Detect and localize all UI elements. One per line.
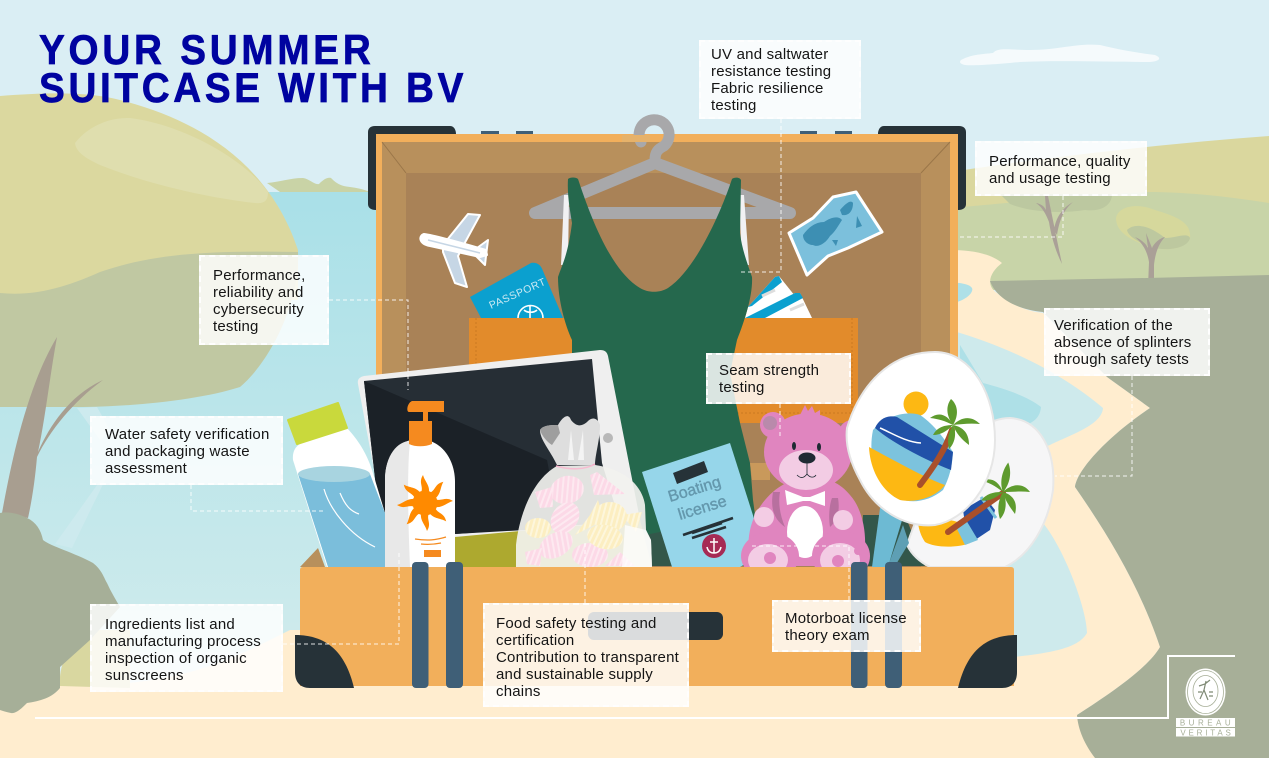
callout: seam strength: testing <box>719 379 765 396</box>
water bottle <box>288 403 385 567</box>
swimsuit <box>558 178 762 566</box>
callout: performance reliability cybersecurity <box>199 255 329 345</box>
suitcase base <box>295 548 1017 688</box>
callout: food safety: Contribution to transparent <box>496 649 679 666</box>
left corner guard <box>295 635 354 688</box>
inner tray <box>750 463 770 480</box>
hill highlight <box>75 118 268 203</box>
lower left hill <box>0 252 298 407</box>
suitcase lid <box>368 126 966 574</box>
callout: water safety: Water safety verification <box>105 426 270 443</box>
world map <box>789 192 882 275</box>
pocket stitching <box>476 318 852 413</box>
callout: performance reliability cybersecurity: Performance, <box>213 267 305 284</box>
callout: motorboat license: Motorboat license <box>785 610 907 627</box>
hanger <box>535 120 790 213</box>
hook shadow on lid <box>622 135 650 142</box>
callout: water safety: assessment <box>105 460 187 477</box>
tablet button <box>603 433 613 443</box>
callout: performance reliability cybersecurity: reliability and <box>213 284 304 301</box>
callout: water safety <box>90 416 283 485</box>
right yellow hill <box>950 136 1269 215</box>
license subtitle: license <box>676 493 729 524</box>
sea <box>0 192 480 652</box>
boarding tickets <box>745 276 812 318</box>
callout: splinter verification <box>1044 308 1210 376</box>
small pool <box>950 283 972 304</box>
boating license <box>642 443 765 567</box>
towel fold <box>888 525 909 566</box>
callout: ingredients: sunscreens <box>105 667 184 684</box>
beach sand <box>0 250 1160 758</box>
organiser pocket <box>469 318 858 423</box>
license title: Boating <box>666 474 723 506</box>
swimsuit shadow <box>620 515 925 566</box>
callout: performance quality usage <box>975 141 1147 196</box>
large beach paddle <box>847 352 995 525</box>
callout: performance reliability cybersecurity: cybersecurity <box>213 301 304 318</box>
passport <box>470 263 563 318</box>
callout: UV and saltwater: resistance testing <box>711 63 831 80</box>
callout: ingredients <box>90 604 283 692</box>
callout: food safety <box>483 603 689 707</box>
lid tabs <box>481 131 852 135</box>
callout: splinter verification: through safety tests <box>1054 351 1189 368</box>
pump <box>407 401 444 446</box>
callout: UV and saltwater: testing <box>711 97 757 114</box>
sun symbol <box>397 475 453 531</box>
tree two <box>1116 206 1190 287</box>
callout: ingredients: inspection of organic <box>105 650 247 667</box>
Bureau Veritas logo <box>1176 668 1235 737</box>
suitcase handle <box>588 612 723 640</box>
bag lower white gloss <box>622 525 652 567</box>
small beach paddle <box>907 418 1053 567</box>
sunscreen bottle <box>385 401 455 567</box>
hanger straps white backing <box>561 195 749 265</box>
paddle picture <box>869 392 980 501</box>
logo seal <box>1186 668 1226 716</box>
tablet screen <box>364 359 620 540</box>
callout: water safety: and packaging waste <box>105 443 250 460</box>
right water <box>950 330 1103 480</box>
cloud <box>960 45 1159 65</box>
candy bag <box>516 416 652 567</box>
teddy bear <box>741 405 870 581</box>
left yellow knoll <box>60 630 130 688</box>
logo word 2: VERITAS <box>1180 728 1234 737</box>
suitcase straps <box>412 562 902 688</box>
right lower water <box>950 505 1087 657</box>
tablet <box>358 350 652 567</box>
passport label: PASSPORT <box>487 276 548 312</box>
callout: ingredients: Ingredients list and <box>105 616 235 633</box>
dashed connector lines <box>191 119 1132 644</box>
anchor glyph <box>707 538 721 553</box>
callout: performance reliability cybersecurity: testing <box>213 318 259 335</box>
light pier stripes <box>55 407 110 548</box>
title: YOUR SUMMER <box>39 25 375 73</box>
callout: seam strength: Seam strength <box>719 362 819 379</box>
bag gloss <box>516 465 652 567</box>
footer rule <box>35 656 1235 718</box>
right dark hill <box>990 275 1269 758</box>
callout: food safety: certification <box>496 632 574 649</box>
tree one <box>1000 194 1112 264</box>
rolled towel <box>872 508 903 567</box>
palm trunk left <box>2 337 103 518</box>
left lid corner <box>368 126 456 210</box>
logo word 1: BUREAU <box>1180 719 1234 728</box>
candies <box>525 472 635 567</box>
callout: motorboat license <box>772 600 921 652</box>
callout: UV and saltwater: UV and saltwater <box>711 46 828 63</box>
far island <box>267 178 370 192</box>
right lid corner <box>878 126 966 210</box>
tablet cover <box>455 520 652 567</box>
callout: splinter verification: Verification of the <box>1054 317 1173 334</box>
anchor badge <box>702 534 726 558</box>
plane icon <box>420 214 488 287</box>
callout: performance quality usage: Performance, quality <box>989 153 1131 170</box>
bag ruffle <box>540 416 600 465</box>
right green hill <box>950 192 1269 290</box>
callout: motorboat license: theory exam <box>785 627 870 644</box>
right corner guard <box>958 635 1017 688</box>
callout: performance quality usage: and usage testing <box>989 170 1111 187</box>
inner flap <box>300 548 325 567</box>
passport globe <box>518 305 543 318</box>
left rock <box>0 512 120 713</box>
callout: UV and saltwater: Fabric resilience <box>711 80 824 97</box>
callout: ingredients: manufacturing process <box>105 633 261 650</box>
callout: seam strength <box>706 353 851 404</box>
callout: food safety: and sustainable supply <box>496 666 653 683</box>
right water deep <box>960 345 1041 430</box>
callout: splinter verification: absence of splinters <box>1054 334 1191 351</box>
left hill <box>0 93 298 300</box>
callout: food safety: Food safety testing and <box>496 615 657 632</box>
tablet screen shadow <box>364 381 560 540</box>
callout: food safety: chains <box>496 683 541 700</box>
callout: UV and saltwater <box>699 40 861 119</box>
title: SUITCASE WITH BV <box>39 63 467 111</box>
title <box>39 25 467 111</box>
